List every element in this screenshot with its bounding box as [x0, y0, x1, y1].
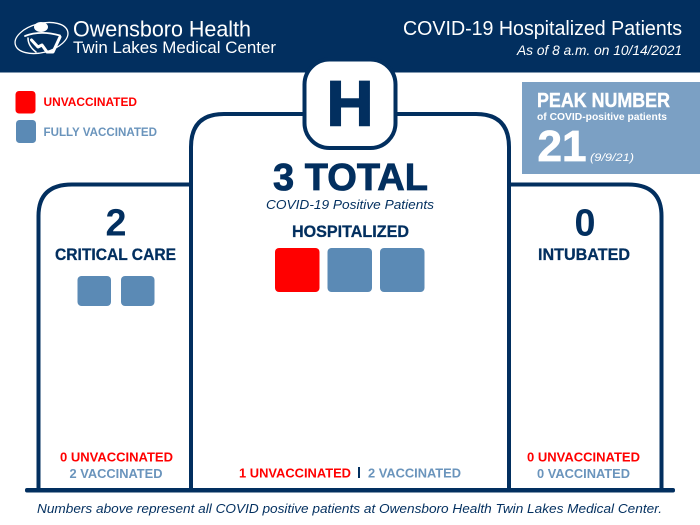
date subtitle: As of 8 a.m. on 10/14/2021 [516, 42, 682, 58]
logo text: Owensboro Health: Owensboro Health [73, 16, 251, 42]
hospitalized unvaccinated: 1 UNVACCINATED [239, 466, 351, 480]
panel: intubated [508, 184, 662, 490]
critical care label: CRITICAL CARE [55, 245, 176, 264]
peak heading: PEAK NUMBER [537, 90, 670, 112]
critical care vaccinated: 2 VACCINATED [70, 466, 162, 481]
peak value: 21 [538, 122, 586, 171]
icon: hospital H: H [326, 68, 374, 140]
panel: critical care [38, 184, 192, 490]
total count: 3 TOTAL [273, 157, 428, 199]
intubated count: 0 [574, 202, 596, 244]
hospitalized squares [275, 248, 424, 292]
legend label: fully vaccinated: FULLY VACCINATED [44, 127, 157, 139]
icon: hospital H [304, 60, 396, 148]
intubated vaccinated: 0 VACCINATED [537, 466, 630, 481]
legend swatch: fully vaccinated [16, 120, 36, 143]
baseline [25, 488, 675, 492]
icon: logo [12, 17, 71, 59]
peak date: (9/9/21) [590, 152, 634, 164]
panel: hospitalized [191, 114, 509, 490]
header band [0, 0, 700, 72]
total subtitle: COVID-19 Positive Patients [266, 197, 435, 212]
intubated label: INTUBATED [538, 245, 630, 264]
critical care squares [78, 276, 154, 306]
hospitalized vaccinated: 2 VACCINATED [368, 466, 461, 480]
footnote: Numbers above represent all COVID positive patients at Owensboro Health Twin Lakes Medical Center. [37, 501, 662, 516]
critical care count: 2 [106, 202, 126, 244]
legend label: unvaccinated: UNVACCINATED [44, 97, 137, 109]
hospitalized label: HOSPITALIZED [292, 222, 409, 241]
panel: peak number [522, 82, 700, 174]
legend swatch: unvaccinated [16, 91, 36, 114]
peak subheading: of COVID-positive patients [537, 111, 667, 123]
intubated unvaccinated: 0 UNVACCINATED [527, 450, 640, 464]
separator [358, 467, 360, 478]
title: COVID-19 Hospitalized Patients [403, 18, 682, 40]
legend [16, 91, 157, 143]
logo text: Twin Lakes Medical Center: Twin Lakes Medical Center [73, 38, 276, 57]
critical care unvaccinated: 0 UNVACCINATED [60, 450, 173, 464]
